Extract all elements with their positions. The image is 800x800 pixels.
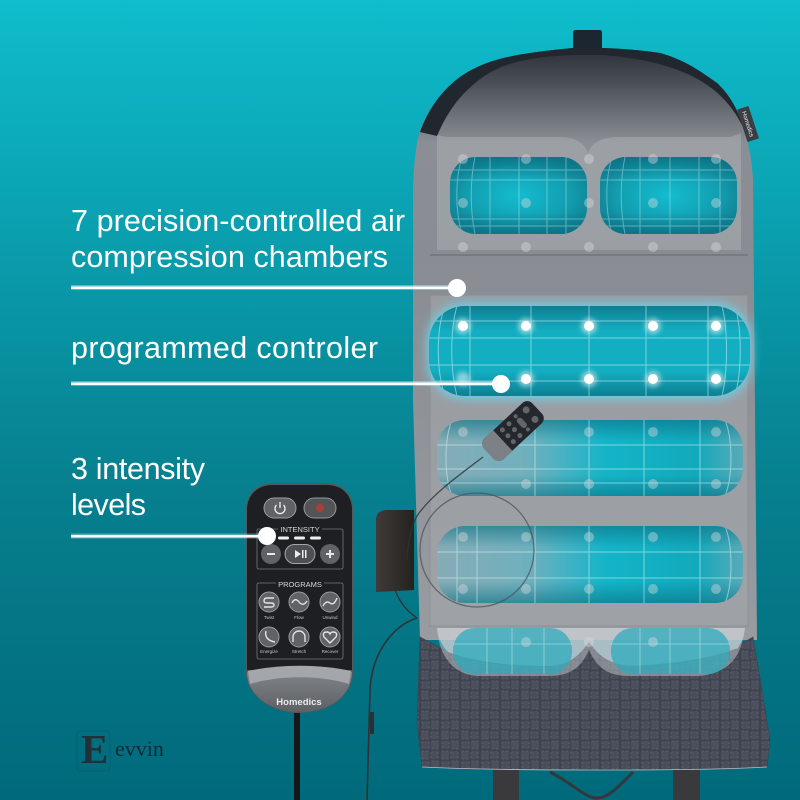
lit dots — [458, 321, 721, 384]
chamber: top right — [600, 157, 737, 234]
bottom straps — [493, 760, 700, 800]
middle panel — [430, 295, 748, 626]
heading text: programmed controler — [71, 331, 378, 365]
intensity label: INTENSITY — [280, 525, 320, 534]
massage mat — [413, 30, 770, 800]
seat bottom edge — [422, 767, 767, 770]
logo: Evvin: evvin — [115, 736, 164, 761]
heading text: 7 precision-controlled air — [71, 204, 405, 238]
heat button — [304, 498, 336, 518]
side pouch — [376, 510, 414, 592]
callout: controller — [71, 331, 510, 393]
programs box — [257, 583, 343, 659]
remote casing — [246, 483, 353, 713]
minus button — [261, 544, 281, 564]
program labels: Unwind — [322, 615, 338, 620]
leader line — [71, 279, 466, 297]
chamber: top left — [450, 157, 587, 234]
program glyphs — [264, 598, 337, 643]
brand tag — [737, 106, 759, 142]
program labels — [260, 615, 339, 654]
program labels: Flow — [294, 615, 304, 620]
power button — [264, 498, 296, 518]
large remote control — [246, 483, 353, 800]
intensity level dashes — [278, 536, 321, 540]
brand tag: Homedics — [740, 111, 754, 138]
program labels: Recover — [322, 649, 339, 654]
bottom light panel — [437, 628, 745, 676]
callout: air chambers — [71, 204, 466, 297]
program labels: Stretch — [292, 649, 307, 654]
chamber: third — [437, 420, 743, 496]
heading text: compression chambers — [71, 240, 388, 274]
plus button — [320, 544, 340, 564]
top strap — [573, 30, 602, 62]
mat body — [413, 48, 757, 640]
small remote on mat — [479, 398, 547, 464]
bottom panel upper part — [437, 628, 745, 666]
heading text: 3 intensity — [71, 452, 206, 486]
intensity box — [257, 529, 343, 569]
glow around bright chamber — [427, 303, 752, 399]
faint dots — [458, 154, 721, 647]
seat cushion — [417, 637, 770, 770]
play pause button — [285, 544, 315, 564]
program labels: Energize — [260, 649, 278, 654]
leader line — [71, 527, 276, 545]
chamber: fourth — [437, 526, 743, 603]
controller cord — [367, 457, 534, 800]
program buttons — [259, 592, 340, 647]
dark top band — [420, 48, 743, 136]
chamber: middle, lit — [429, 306, 750, 396]
logo: Evvin — [77, 726, 164, 772]
upper chamber panel — [437, 133, 741, 250]
programs label: PROGRAMS — [278, 580, 322, 589]
remote handle — [247, 666, 352, 712]
logo: Evvin: E — [81, 726, 108, 772]
leader line — [71, 375, 510, 393]
program labels: Twist — [264, 615, 275, 620]
heading text: levels — [71, 488, 146, 522]
remote brand: Homedics — [276, 697, 322, 708]
callout: intensity — [71, 452, 276, 545]
chamber: bottom left — [453, 628, 572, 674]
remote cord — [294, 710, 300, 800]
chamber: bottom right — [611, 628, 730, 674]
lit dots halo — [455, 318, 724, 387]
panel bottom seam — [430, 254, 748, 256]
